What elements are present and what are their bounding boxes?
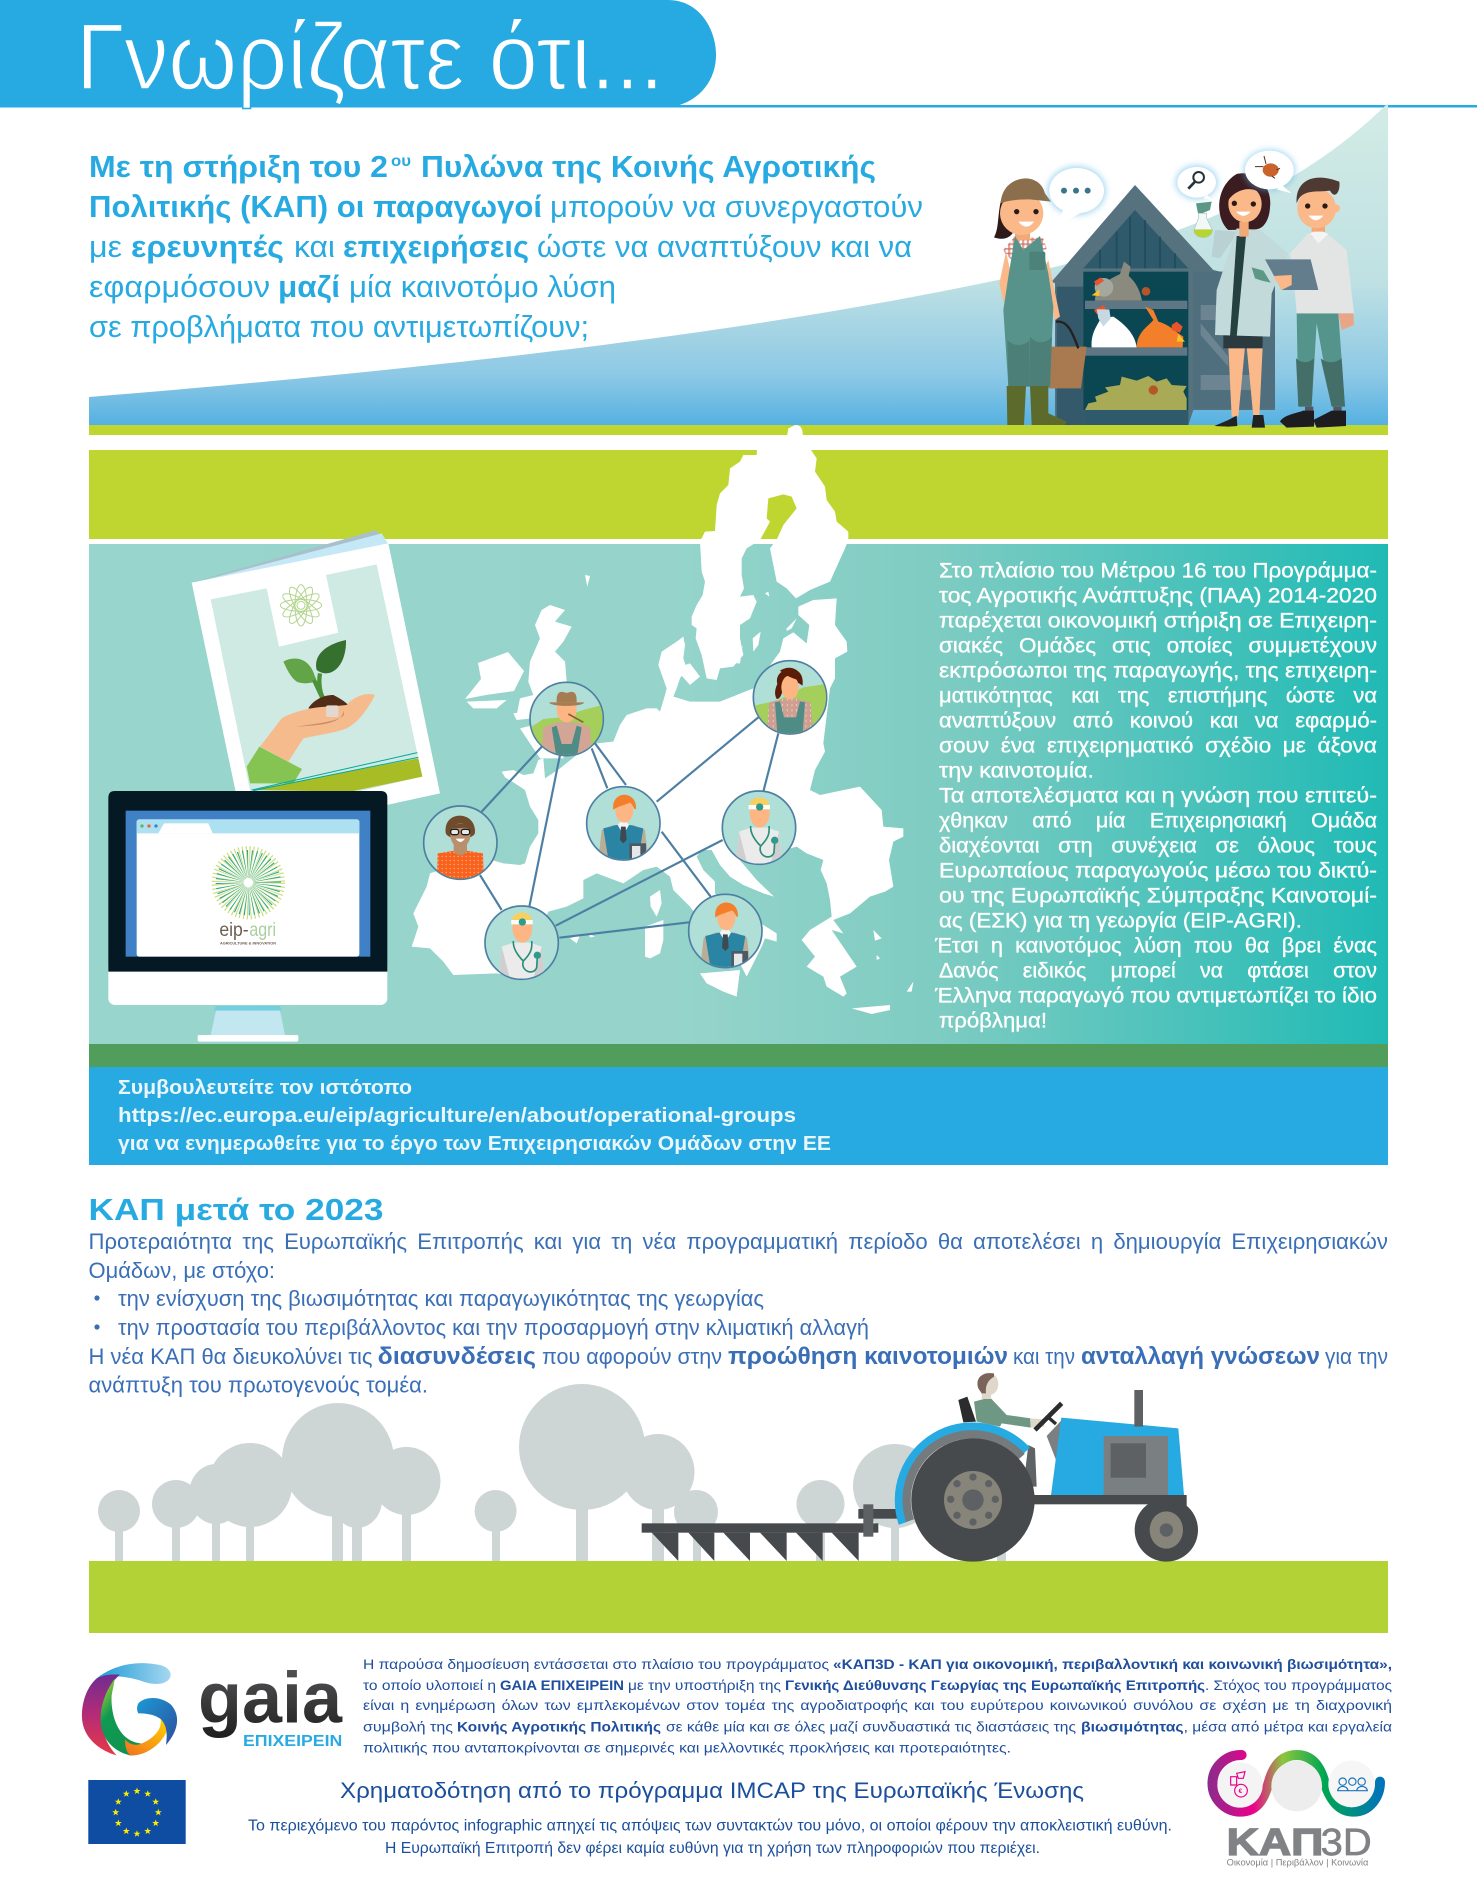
- map side text block: [934, 560, 1377, 1032]
- avatar: businessman lower: [689, 894, 762, 971]
- illustration: tractor with plough: [642, 1373, 1198, 1562]
- text block: CAP after 2023: την ενίσχυση της βιωσιμότητας και παραγωγικότητας της γεωργίας: [118, 1286, 764, 1311]
- text block: funding and disclaimer: Χρηματοδότηση από το πρόγραμμα IMCAP της Ευρωπαϊκής Ένωσης: [340, 1778, 1084, 1803]
- map side text block: σιακές Ομάδες στις οποίες συμμετέχουν: [939, 634, 1377, 658]
- map side text block: Τα αποτελέσματα και η γνώση που επιτεύ-: [939, 784, 1377, 808]
- logo: KAP3D: Οικονομία | Περιβάλλον | Κοινωνία: [1227, 1857, 1368, 1867]
- intro text: επιχειρήσεις: [343, 230, 529, 264]
- text block: CAP after 2023: ανάπτυξη του πρωτογενούς τομέα.: [88, 1372, 428, 1398]
- text block: programme description: Γενικής Διεύθυνσης Γεωργίας της Ευρωπαϊκής Επιτροπής: [785, 1677, 1205, 1693]
- map side text block: εκπρόσωποι της παραγωγής, της επιχειρη-: [939, 660, 1377, 682]
- intro text: Πυλώνα της Κοινής Αγροτικής: [421, 150, 876, 184]
- text block: programme description: «ΚΑΠ3D - ΚΑΠ για οικονομική, περιβαλλοντική και κοινωνική βιωσιμότητα»,: [833, 1656, 1392, 1672]
- logo: KAP3D: 3D: [1321, 1822, 1372, 1864]
- icon: flower logo: [280, 584, 322, 626]
- map side text block: χθηκαν από μία Επιχειρησιακή Ομάδα: [939, 810, 1377, 832]
- illustration: booklet and monitor: [108, 530, 440, 1042]
- map side text block: ας (ΕΣΚ) για τη γεωργία (EIP-AGRI).: [939, 910, 1302, 932]
- avatar: doctor left: [485, 906, 558, 979]
- icon: driver: [958, 1373, 1062, 1430]
- text block: funding and disclaimer: [248, 1778, 1172, 1857]
- map side text block: Έλληνα παραγωγό που αντιμετωπίζει το ίδιο: [934, 984, 1377, 1008]
- network connection lines: [480, 717, 778, 938]
- intro text: ου: [391, 153, 411, 170]
- icon: speech bubble magnifier: [1176, 166, 1217, 200]
- band: dark green strip: [89, 1044, 1388, 1068]
- intro text: εφαρμόσουν: [89, 270, 270, 304]
- map side text block: την καινοτομία.: [939, 760, 1094, 782]
- panel: intro wave background: [89, 103, 1388, 435]
- text block: CAP after 2023: και την: [1013, 1344, 1075, 1369]
- logo: KAP3D: ΚΑΠ: [1227, 1822, 1323, 1864]
- intro text: μία καινοτόμο λύση: [349, 270, 616, 304]
- logo: GAIA Epicheirein: [82, 1659, 343, 1755]
- illustration: farmer and scientists at hen coop: [994, 150, 1354, 428]
- mainland Europe: [412, 598, 903, 997]
- text block: programme description: . Στόχος του προγράμματος: [1205, 1677, 1392, 1693]
- map side text block: τος Αγροτικής Ανάπτυξης (ΠΑΑ) 2014-2020: [939, 584, 1377, 608]
- people avatars on map: [424, 661, 827, 979]
- map side text block: πρόβλημα!: [939, 1010, 1047, 1032]
- avatar: woman with glasses: [424, 806, 497, 879]
- map side text block: σουν ένα επιχειρηματικό σχέδιο με άξονα: [939, 734, 1377, 758]
- icon: tractor body: [1023, 1390, 1187, 1513]
- icon: speech bubble bug: [1244, 150, 1295, 193]
- avatar: businessman center: [587, 787, 660, 863]
- logo: GAIA Epicheirein: ΕΠΙΧΕΙΡΕΙΝ: [243, 1733, 342, 1750]
- text block: programme description: Η παρούσα δημοσίευση εντάσσεται στο πλαίσιο του προγράμματος: [363, 1656, 829, 1672]
- map side text block: διαχέονται στη συνέχεια σε όλους τους: [939, 834, 1377, 858]
- intro text: με: [89, 230, 122, 264]
- Ireland: [465, 652, 524, 699]
- icon: bucket: [1028, 347, 1087, 388]
- icon: monitor: [108, 791, 387, 1042]
- intro text: και: [294, 230, 335, 264]
- intro text: [89, 150, 923, 344]
- text block: programme description: πολιτικής που ανταποκρίνονται σε σημερινές και μελλοντικές προκλήσεις και προτεραιότητες.: [363, 1740, 1011, 1756]
- panel: teal map panel: [89, 544, 1388, 1044]
- icon: tablet and hand: [1265, 259, 1318, 290]
- map side text block: παρέχεται οικονομική στήριξη σε Επιχειρη-: [939, 610, 1377, 632]
- icon: people: [1338, 1778, 1367, 1791]
- text block: CAP after 2023: την προστασία του περιβάλλοντος και την προσαρμογή στην κλιματική αλλαγή: [118, 1315, 869, 1340]
- text block: programme description: GAIA ΕΠΙΧΕΙΡΕΙΝ: [500, 1677, 624, 1693]
- icon: euro bag: [1231, 1772, 1247, 1797]
- icon: eip-agri starburst logo: AGRICULTURE & INNOVATION: [220, 942, 277, 946]
- text block: CAP after 2023: ανταλλαγή γνώσεων: [1081, 1343, 1320, 1370]
- text block: CAP after 2023: διασυνδέσεις: [378, 1343, 536, 1370]
- panel: website link band: για να ενημερωθείτε για το έργο των Επιχειρησιακών Ομάδων στην ΕΕ: [118, 1133, 831, 1155]
- text block: programme description: σε κάθε μία και σε όλες μαζί συνδυαστικά τις διαστάσεις της: [666, 1718, 1076, 1734]
- map of Europe: [412, 425, 913, 1014]
- avatar: male farmer: [530, 682, 603, 756]
- text block: programme description: [363, 1656, 1392, 1756]
- map side text block: αναπτύξουν από κοινού και να εφαρμό-: [939, 710, 1377, 732]
- text block: CAP after 2023: Προτεραιότητα της Ευρωπαϊκής Επιτροπής και για τη νέα προγραμματική περίοδο θα αποτελέσει η δημιουργία Επιχειρησιακών: [88, 1229, 1388, 1254]
- intro text: σε προβλήματα που αντιμετωπίζουν;: [89, 310, 589, 344]
- icon: speech bubble dots: [1048, 167, 1105, 227]
- icon: hens: [1092, 262, 1185, 347]
- panel: website link band: Συμβουλευτείτε τον ιστότοπο: [118, 1077, 412, 1099]
- text block: programme description: είναι η ενημέρωση όλων των εμπλεκομένων στον τομέα της αγροδιατροφής και του ευρύτερου κοινωνικού συνόλου σε σχέση με τη διαχρονική: [363, 1697, 1392, 1713]
- icon: hen coop: [1052, 185, 1275, 425]
- icon: female scientist: [1194, 173, 1288, 428]
- map side text block: ματικότητας και της επιστήμης ώστε να: [939, 684, 1377, 708]
- intro text: Με τη στήριξη του 2: [89, 150, 388, 184]
- text block: CAP after 2023: για την: [1325, 1344, 1388, 1369]
- Scandinavia and Finland: [692, 425, 848, 680]
- icon: booklet: [192, 530, 440, 805]
- logo: KAP3D: [1212, 1755, 1380, 1867]
- intro text: ερευνητές: [131, 230, 284, 264]
- icon: plough: [642, 1504, 900, 1561]
- icon: eip-agri starburst logo: [219, 862, 277, 946]
- avatar: doctor right: [722, 791, 796, 864]
- header banner: [0, 0, 1477, 109]
- UK: [517, 605, 572, 758]
- intro text: ώστε να αναπτύξουν και να: [537, 230, 912, 264]
- islands: [467, 575, 913, 1014]
- trees: [98, 1384, 1006, 1561]
- intro text: Πολιτικής (ΚΑΠ) οι παραγωγοί: [89, 190, 542, 224]
- map side text block: Ευρωπαίους παραγωγούς μέσω του δικτύ-: [939, 860, 1377, 882]
- map side text block: ου της Ευρωπαϊκής Σύμπραξης Καινοτομί-: [939, 884, 1377, 908]
- band: lime strip above map: [89, 450, 1388, 539]
- text block: programme description: , μέσα από μέτρα και εργαλεία: [1184, 1718, 1392, 1734]
- text block: programme description: το οποίο υλοποιεί η: [363, 1677, 496, 1693]
- map side text block: Δανός ειδικός μπορεί να φτάσει στον: [939, 960, 1377, 982]
- ground: [89, 1561, 1388, 1633]
- text block: CAP after 2023: Η νέα ΚΑΠ θα διευκολύνει τις: [88, 1344, 372, 1369]
- icon: flask: [1194, 213, 1212, 237]
- icon: euro bag: €: [1239, 1788, 1243, 1795]
- text block: funding and disclaimer: Το περιεχόμενο του παρόντος infographic απηχεί τις απόψεις των συντακτών του μόνο, οι οποίοι φέρουν την αποκλειστική ευθύνη.: [248, 1818, 1172, 1834]
- icon: farmer: [994, 178, 1087, 425]
- intro text: μπορούν να συνεργαστούν: [550, 190, 923, 224]
- heading: CAP after 2023: ΚΑΠ μετά το 2023: [88, 1192, 384, 1227]
- text block: programme description: Κοινής Αγροτικής Πολιτικής: [457, 1718, 661, 1734]
- icon: male researcher: [1280, 178, 1354, 428]
- title: Γνωρίζατε ότι...: [76, 4, 664, 109]
- icon: tractor front wheel: [1135, 1498, 1198, 1562]
- intro text: μαζί: [278, 270, 340, 304]
- icon: tractor rear wheel and fender: [899, 1427, 1035, 1562]
- icon: EU flag: [88, 1780, 186, 1844]
- text block: programme description: με την υποστήριξη της: [628, 1677, 781, 1693]
- text block: funding and disclaimer: Η Ευρωπαϊκή Επιτροπή δεν φέρει καμία ευθύνη για τη χρήση των πληροφοριών που περιέχει.: [385, 1840, 1040, 1857]
- panel: website link band: [89, 1067, 1388, 1165]
- text block: CAP after 2023: [88, 1229, 1388, 1398]
- text block: CAP after 2023: που αφορούν στην: [542, 1344, 722, 1369]
- icon: hand with seedling: [247, 640, 375, 783]
- map side text block: Στο πλαίσιο του Μέτρου 16 του Προγράμμα-: [939, 560, 1377, 582]
- panel: website link band: https://ec.europa.eu/eip/agriculture/en/about/operational-groups: [118, 1105, 796, 1127]
- text block: programme description: βιωσιμότητας: [1081, 1718, 1184, 1734]
- icon: eip-agri starburst logo: agri: [249, 920, 276, 941]
- map side text block: Έτσι η καινοτόμος λύση που θα βρει ένας: [934, 934, 1377, 958]
- avatar: female farmer: [753, 661, 827, 734]
- text block: programme description: συμβολή της: [363, 1718, 453, 1734]
- icon: eip-agri starburst logo: eip-: [219, 920, 249, 941]
- text block: CAP after 2023: προώθηση καινοτομιών: [728, 1343, 1008, 1370]
- logo: GAIA Epicheirein: gaia: [198, 1659, 343, 1739]
- text block: CAP after 2023: Ομάδων, με στόχο:: [88, 1258, 275, 1283]
